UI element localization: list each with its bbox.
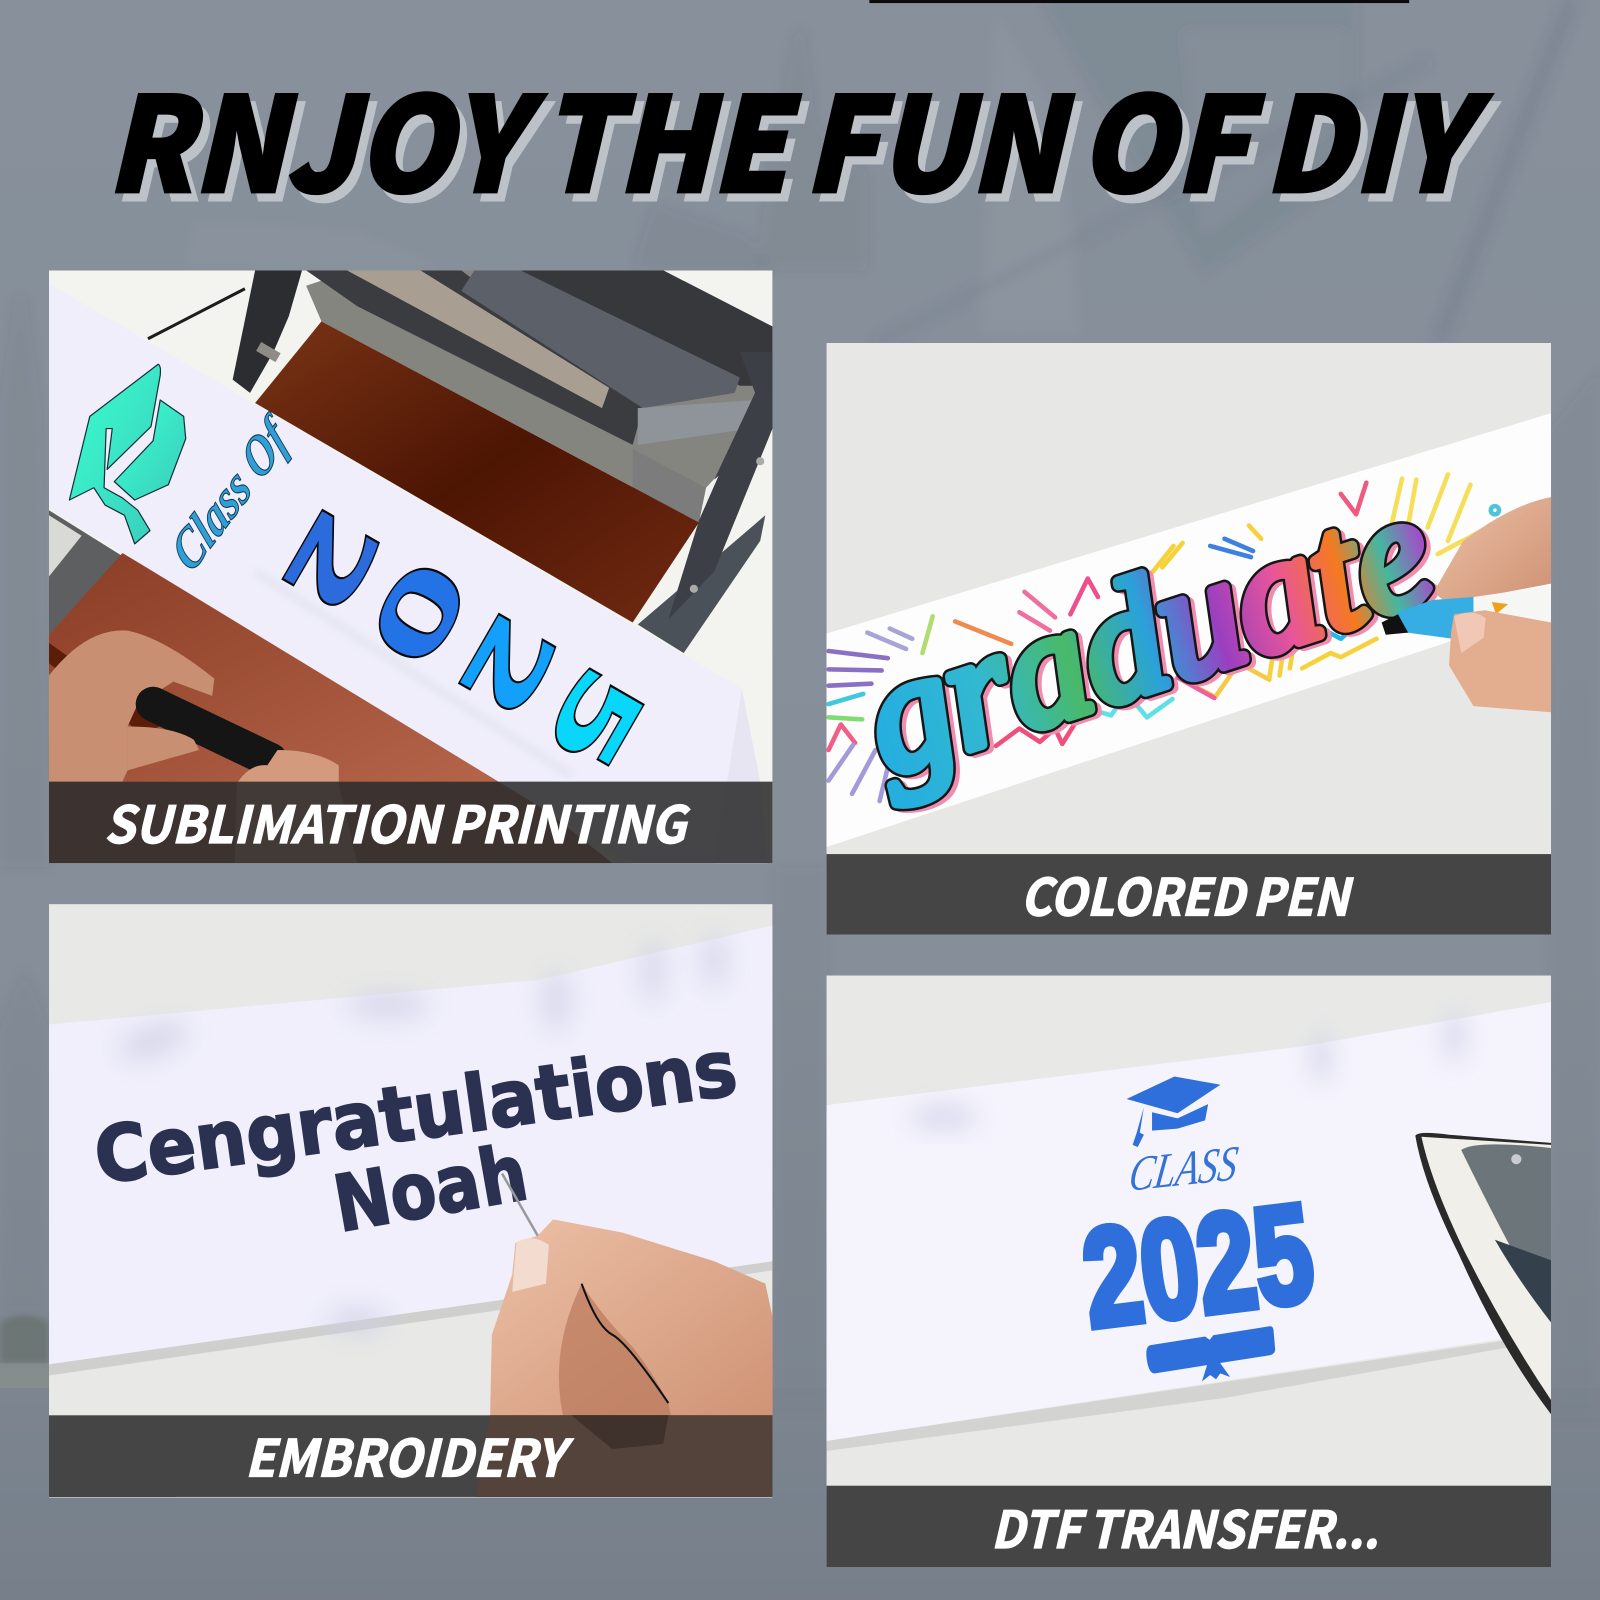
white sash	[827, 413, 1551, 847]
text: 2025: 2025	[1075, 1175, 1321, 1357]
text: Class Of: Class Of	[162, 404, 301, 584]
title: RNJOY THE FUN OF DIY	[113, 48, 1500, 238]
white sash	[49, 284, 767, 863]
hand with thread	[490, 1219, 772, 1429]
panel: sublimation printing	[49, 270, 772, 863]
panel: embroidery	[49, 904, 772, 1497]
text: 2025 rotated digits	[281, 508, 645, 767]
icon: blue mortarboard	[1127, 1077, 1220, 1147]
panel: DTF transfer	[827, 976, 1551, 1567]
caption bar	[49, 1415, 772, 1497]
embroidered text	[97, 1052, 736, 1232]
brown upper plate	[255, 321, 699, 622]
caption: embroidery: EMBROIDERY	[245, 1418, 574, 1492]
title: RNJOY THE FUN OF DIY	[106, 40, 1493, 230]
icon: diploma	[1145, 1326, 1280, 1389]
embroidered text: Noah	[327, 1128, 534, 1250]
text: 2025 rotated digits: 2	[256, 488, 403, 634]
top black bar	[869, 0, 1409, 3]
embroidered text: Cengratulations	[89, 1023, 742, 1202]
lavender sash	[49, 926, 772, 1364]
caption: sublimation printing: SUBLIMATION PRINTING	[104, 784, 690, 858]
lower machine wedge	[49, 510, 120, 635]
lettering: graduate: graduate	[848, 462, 1457, 812]
hands and roller handle	[49, 630, 357, 863]
icon: clothes iron	[1415, 1133, 1551, 1414]
panel: colored pen	[827, 343, 1551, 935]
sash shadow	[826, 1340, 1506, 1451]
brown lower plate	[49, 553, 510, 782]
text: 2025 rotated digits: 5	[521, 646, 668, 791]
caption bar	[49, 782, 772, 863]
text: 2025 rotated digits: 0	[344, 539, 491, 685]
icon: teal graduation cap	[69, 364, 186, 544]
needle	[502, 1173, 538, 1236]
lavender sash	[827, 1002, 1551, 1441]
text: CLASS: CLASS	[1126, 1135, 1241, 1202]
doodles: rays and zigzags	[829, 474, 1499, 806]
hand with marker	[1382, 497, 1551, 712]
caption bar	[827, 1486, 1551, 1567]
sash shadow	[49, 1261, 772, 1376]
heat press machine	[233, 270, 772, 653]
caption: colored pen: COLORED PEN	[1020, 856, 1353, 930]
text: 2025 rotated digits: 2	[433, 592, 580, 738]
caption bar	[827, 854, 1551, 935]
lettering: graduate: graduate	[843, 459, 1451, 810]
lettering: graduate: graduate	[843, 459, 1451, 810]
caption: DTF transfer: DTF TRANSFER...	[991, 1489, 1379, 1563]
